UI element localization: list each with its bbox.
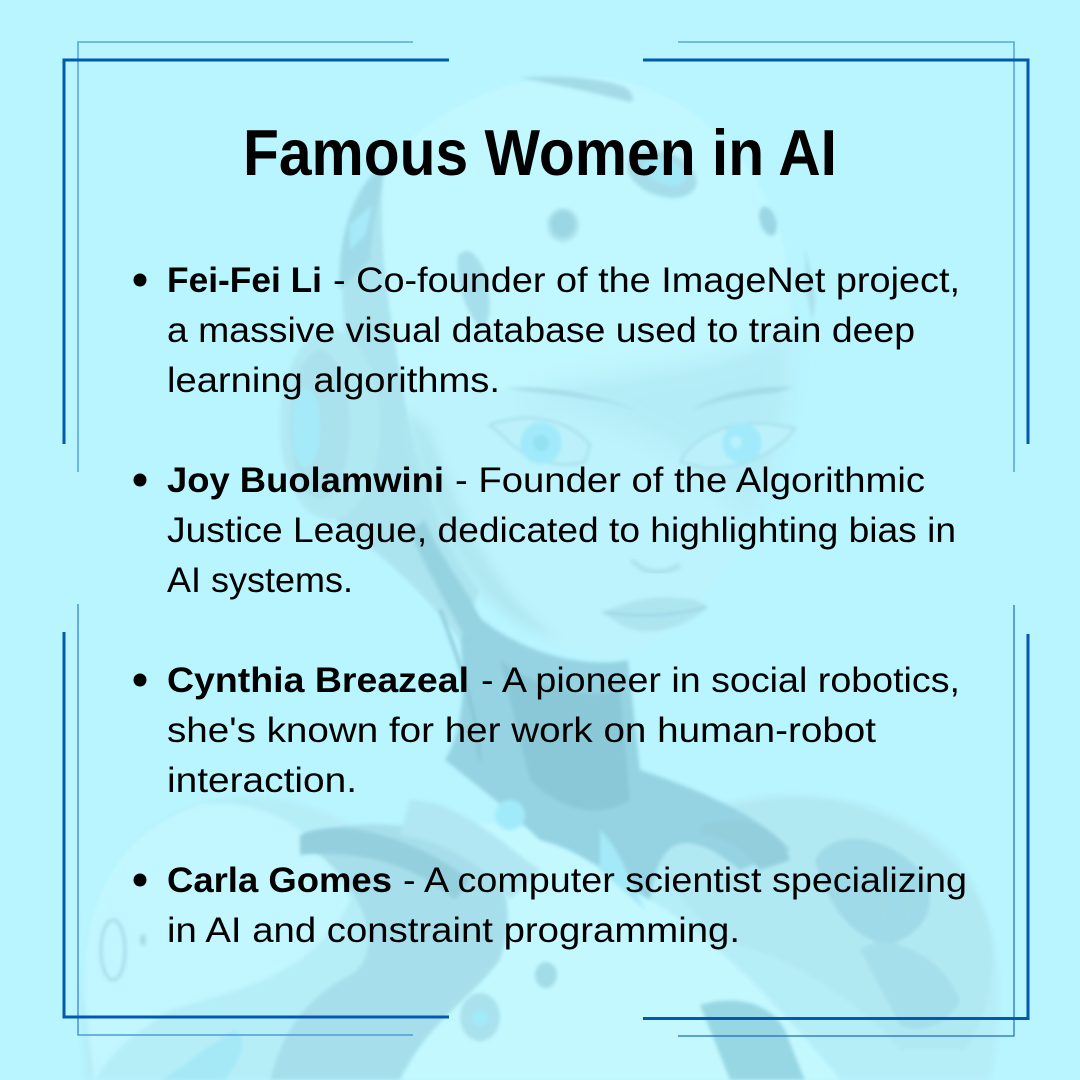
item: Joy Buolamwini: Joy Buolamwini xyxy=(167,461,444,500)
item: Carla Gomes: Carla Gomes xyxy=(167,861,392,900)
item: Joy Buolamwini: - Founder of the Algorithmic xyxy=(455,461,925,500)
bullet list xyxy=(134,261,967,950)
item: Fei-Fei Li: learning algorithms. xyxy=(167,361,500,400)
item: Joy Buolamwini: AI systems. xyxy=(167,561,353,600)
item: Fei-Fei Li: - Co-founder of the ImageNet project, xyxy=(333,261,960,300)
frame top-right xyxy=(643,42,1028,472)
item: Carla Gomes xyxy=(134,861,967,950)
item: Cynthia Breazeal xyxy=(134,661,960,800)
nose xyxy=(632,560,680,572)
frame bottom-right xyxy=(643,605,1028,1036)
frame top-left xyxy=(64,42,449,472)
item: Joy Buolamwini xyxy=(134,461,956,600)
lips xyxy=(603,597,707,631)
item: Carla Gomes: - A computer scientist specializing xyxy=(403,861,967,900)
robot body: shoulders and chest xyxy=(80,794,1000,1080)
item: Joy Buolamwini: Justice League, dedicated to highlighting bias in xyxy=(167,511,956,550)
item: Fei-Fei Li: Fei-Fei Li xyxy=(167,261,322,300)
eyebrows xyxy=(505,387,795,410)
item: Cynthia Breazeal: - A pioneer in social robotics, xyxy=(481,661,960,700)
frame bottom-left xyxy=(64,604,449,1035)
item: Carla Gomes: in AI and constraint programming. xyxy=(167,911,740,950)
head and face xyxy=(382,76,796,658)
item: Fei-Fei Li: a massive visual database used to train deep xyxy=(167,311,915,350)
item: Fei-Fei Li xyxy=(134,261,960,400)
item: Cynthia Breazeal: interaction. xyxy=(167,761,357,800)
title: Famous Women in AI xyxy=(243,116,837,189)
item: Cynthia Breazeal: she's known for her work on human-robot xyxy=(167,711,876,750)
hair band and headset xyxy=(280,165,480,760)
shoulder details xyxy=(101,883,910,1080)
neck and collar mechanics xyxy=(300,590,790,910)
head sockets and sensors xyxy=(457,76,815,327)
eyes xyxy=(490,418,795,468)
item: Cynthia Breazeal: Cynthia Breazeal xyxy=(167,661,469,700)
robot illustration xyxy=(80,76,1000,1080)
